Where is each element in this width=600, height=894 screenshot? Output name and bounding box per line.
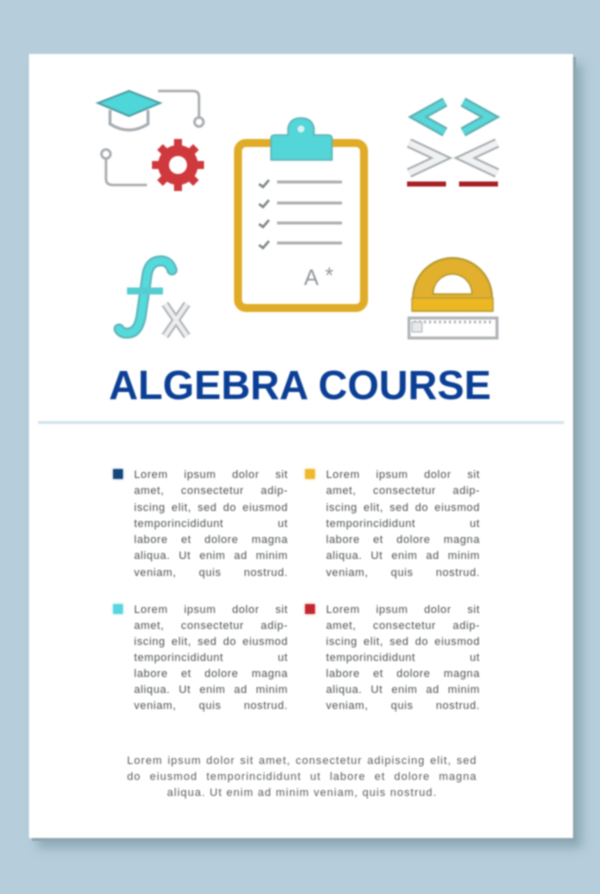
text block: top right: iscing elit, sed do eiusmod: [326, 502, 480, 514]
text block: top left: [133, 469, 288, 580]
bullet: navy: [113, 469, 123, 479]
text block: top right: amet, consectetur adip-: [326, 485, 480, 497]
text block: bottom left: iscing elit, sed do eiusmod: [134, 636, 288, 648]
icon: function fx: [119, 261, 187, 336]
text block: top left: veniam, quis nostrud.: [134, 567, 288, 579]
text block: bottom left: [133, 604, 288, 712]
white page panel: [29, 54, 573, 838]
bullet: red: [305, 604, 315, 614]
text block: bottom left: aliqua. Ut enim ad minim: [134, 684, 288, 696]
icon: red gear: [152, 139, 204, 191]
text block: bottom right: veniam, quis nostrud.: [326, 700, 480, 712]
text block: top left: aliqua. Ut enim ad minim: [134, 550, 288, 562]
text block: top left: temporincididunt ut: [134, 518, 288, 530]
text block: top left: labore et dolore magna: [134, 534, 288, 546]
title: ALGEBRA COURSE: [109, 362, 491, 408]
arrow: cap to gear: [158, 91, 204, 126]
footer text: Lorem ipsum dolor sit amet, consectetur adipiscing elit, sed: [127, 755, 477, 767]
text block: bottom left: temporincididunt ut: [134, 652, 288, 664]
text block: bottom right: [325, 604, 480, 712]
text block: bottom left: Lorem ipsum dolor sit: [134, 604, 288, 616]
footer text: do eiusmod temporincididunt ut labore et dolore magna: [127, 771, 477, 783]
bullet: yellow: [305, 469, 315, 479]
bullet: cyan: [113, 604, 123, 614]
icons illustration: [95, 89, 501, 340]
text block: bottom right: labore et dolore magna: [326, 668, 480, 680]
text block: top right: Lorem ipsum dolor sit: [326, 469, 480, 481]
text block: bottom right: aliqua. Ut enim ad minim: [326, 684, 480, 696]
text block: top right: labore et dolore magna: [326, 534, 480, 546]
text block: bottom right: temporincididunt ut: [326, 652, 480, 664]
text block: top right: temporincididunt ut: [326, 518, 480, 530]
text block: top left: iscing elit, sed do eiusmod: [134, 502, 288, 514]
text block: top right: [325, 469, 480, 580]
arrow: gear to cap: [102, 150, 147, 185]
text block: bottom right: iscing elit, sed do eiusmod: [326, 636, 480, 648]
icon: clipboard: [238, 118, 364, 308]
grade: A: [304, 265, 319, 290]
text block: bottom right: amet, consectetur adip-: [326, 620, 480, 632]
icon: clipboard: *: [325, 263, 334, 288]
icon: protractor and ruler: [409, 258, 497, 338]
text block: bottom left: veniam, quis nostrud.: [134, 700, 288, 712]
footer text: aliqua. Ut enim ad minim veniam, quis nostrud.: [167, 787, 437, 799]
text block: bottom left: amet, consectetur adip-: [134, 620, 288, 632]
checklist: [259, 180, 342, 248]
text block: bottom right: Lorem ipsum dolor sit: [326, 604, 480, 616]
text block: bottom left: labore et dolore magna: [134, 668, 288, 680]
text block: top left: Lorem ipsum dolor sit: [134, 469, 288, 481]
icon: less and greater than signs: [407, 102, 498, 184]
text block: top left: amet, consectetur adip-: [134, 485, 288, 497]
icon: graduation cap: [98, 91, 160, 130]
footer text: [126, 755, 477, 800]
text block: top right: veniam, quis nostrud.: [326, 567, 480, 579]
text block: top right: aliqua. Ut enim ad minim: [326, 550, 480, 562]
